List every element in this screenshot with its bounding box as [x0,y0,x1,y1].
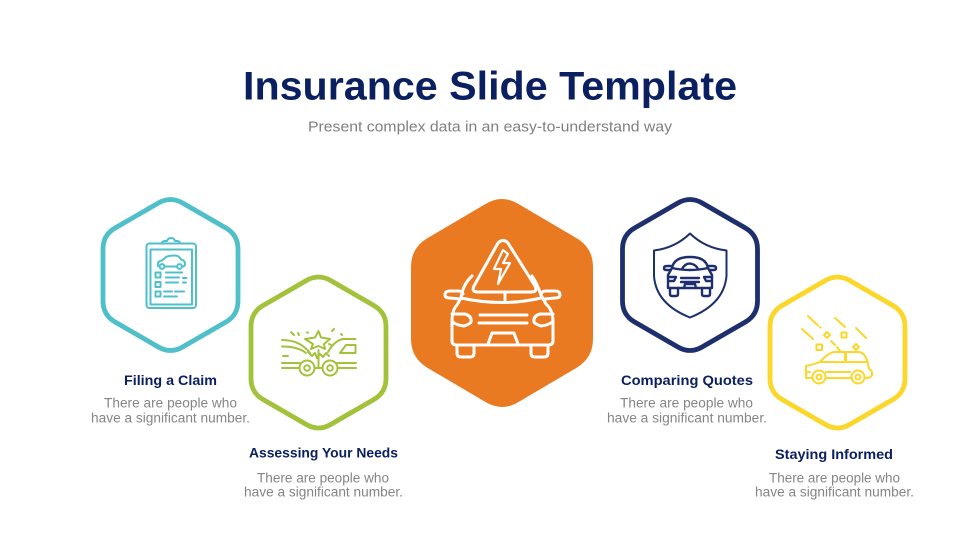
icon: car crash [282,329,356,376]
description: comparing quotes [607,396,767,426]
hexagon outline: navy [622,200,758,350]
label: staying informed: Staying Informed [775,446,893,462]
icon: electric car with warning triangle [445,240,560,357]
panel: central orange hexagon [411,199,593,407]
icon: clipboard with car [146,238,196,308]
icon: car under falling debris [802,316,872,384]
label: assessing your needs: Assessing Your Needs [249,444,398,460]
hexagon outline: green [251,277,386,428]
hexagon outline: yellow [770,277,905,428]
description: filing a claim [91,396,250,426]
panel: filing a claim [91,200,250,426]
description: filing a claim: have a significant number. [91,410,250,426]
description: staying informed [755,470,914,500]
description: assessing your needs: There are people who [257,470,389,486]
description: staying informed: There are people who [769,470,900,486]
description: filing a claim: There are people who [104,396,237,410]
label: comparing quotes: Comparing Quotes [621,372,753,388]
subtitle: Present complex data in an easy-to-understand way [308,118,673,136]
description: staying informed: have a significant number. [755,484,914,500]
label: filing a claim: Filing a Claim [124,372,217,388]
description: assessing your needs [244,470,403,500]
description: assessing your needs: have a significant number. [244,484,403,500]
hexagon fill: orange [411,199,593,407]
panel: comparing quotes [607,200,767,426]
panel: assessing your needs [244,277,403,500]
hexagon outline: teal [103,200,238,350]
icon: shield with car [654,234,726,318]
title: Insurance Slide Template [243,64,737,108]
description: comparing quotes: have a significant number. [607,410,767,426]
description: comparing quotes: There are people who [620,396,753,410]
panel: staying informed [755,277,914,500]
